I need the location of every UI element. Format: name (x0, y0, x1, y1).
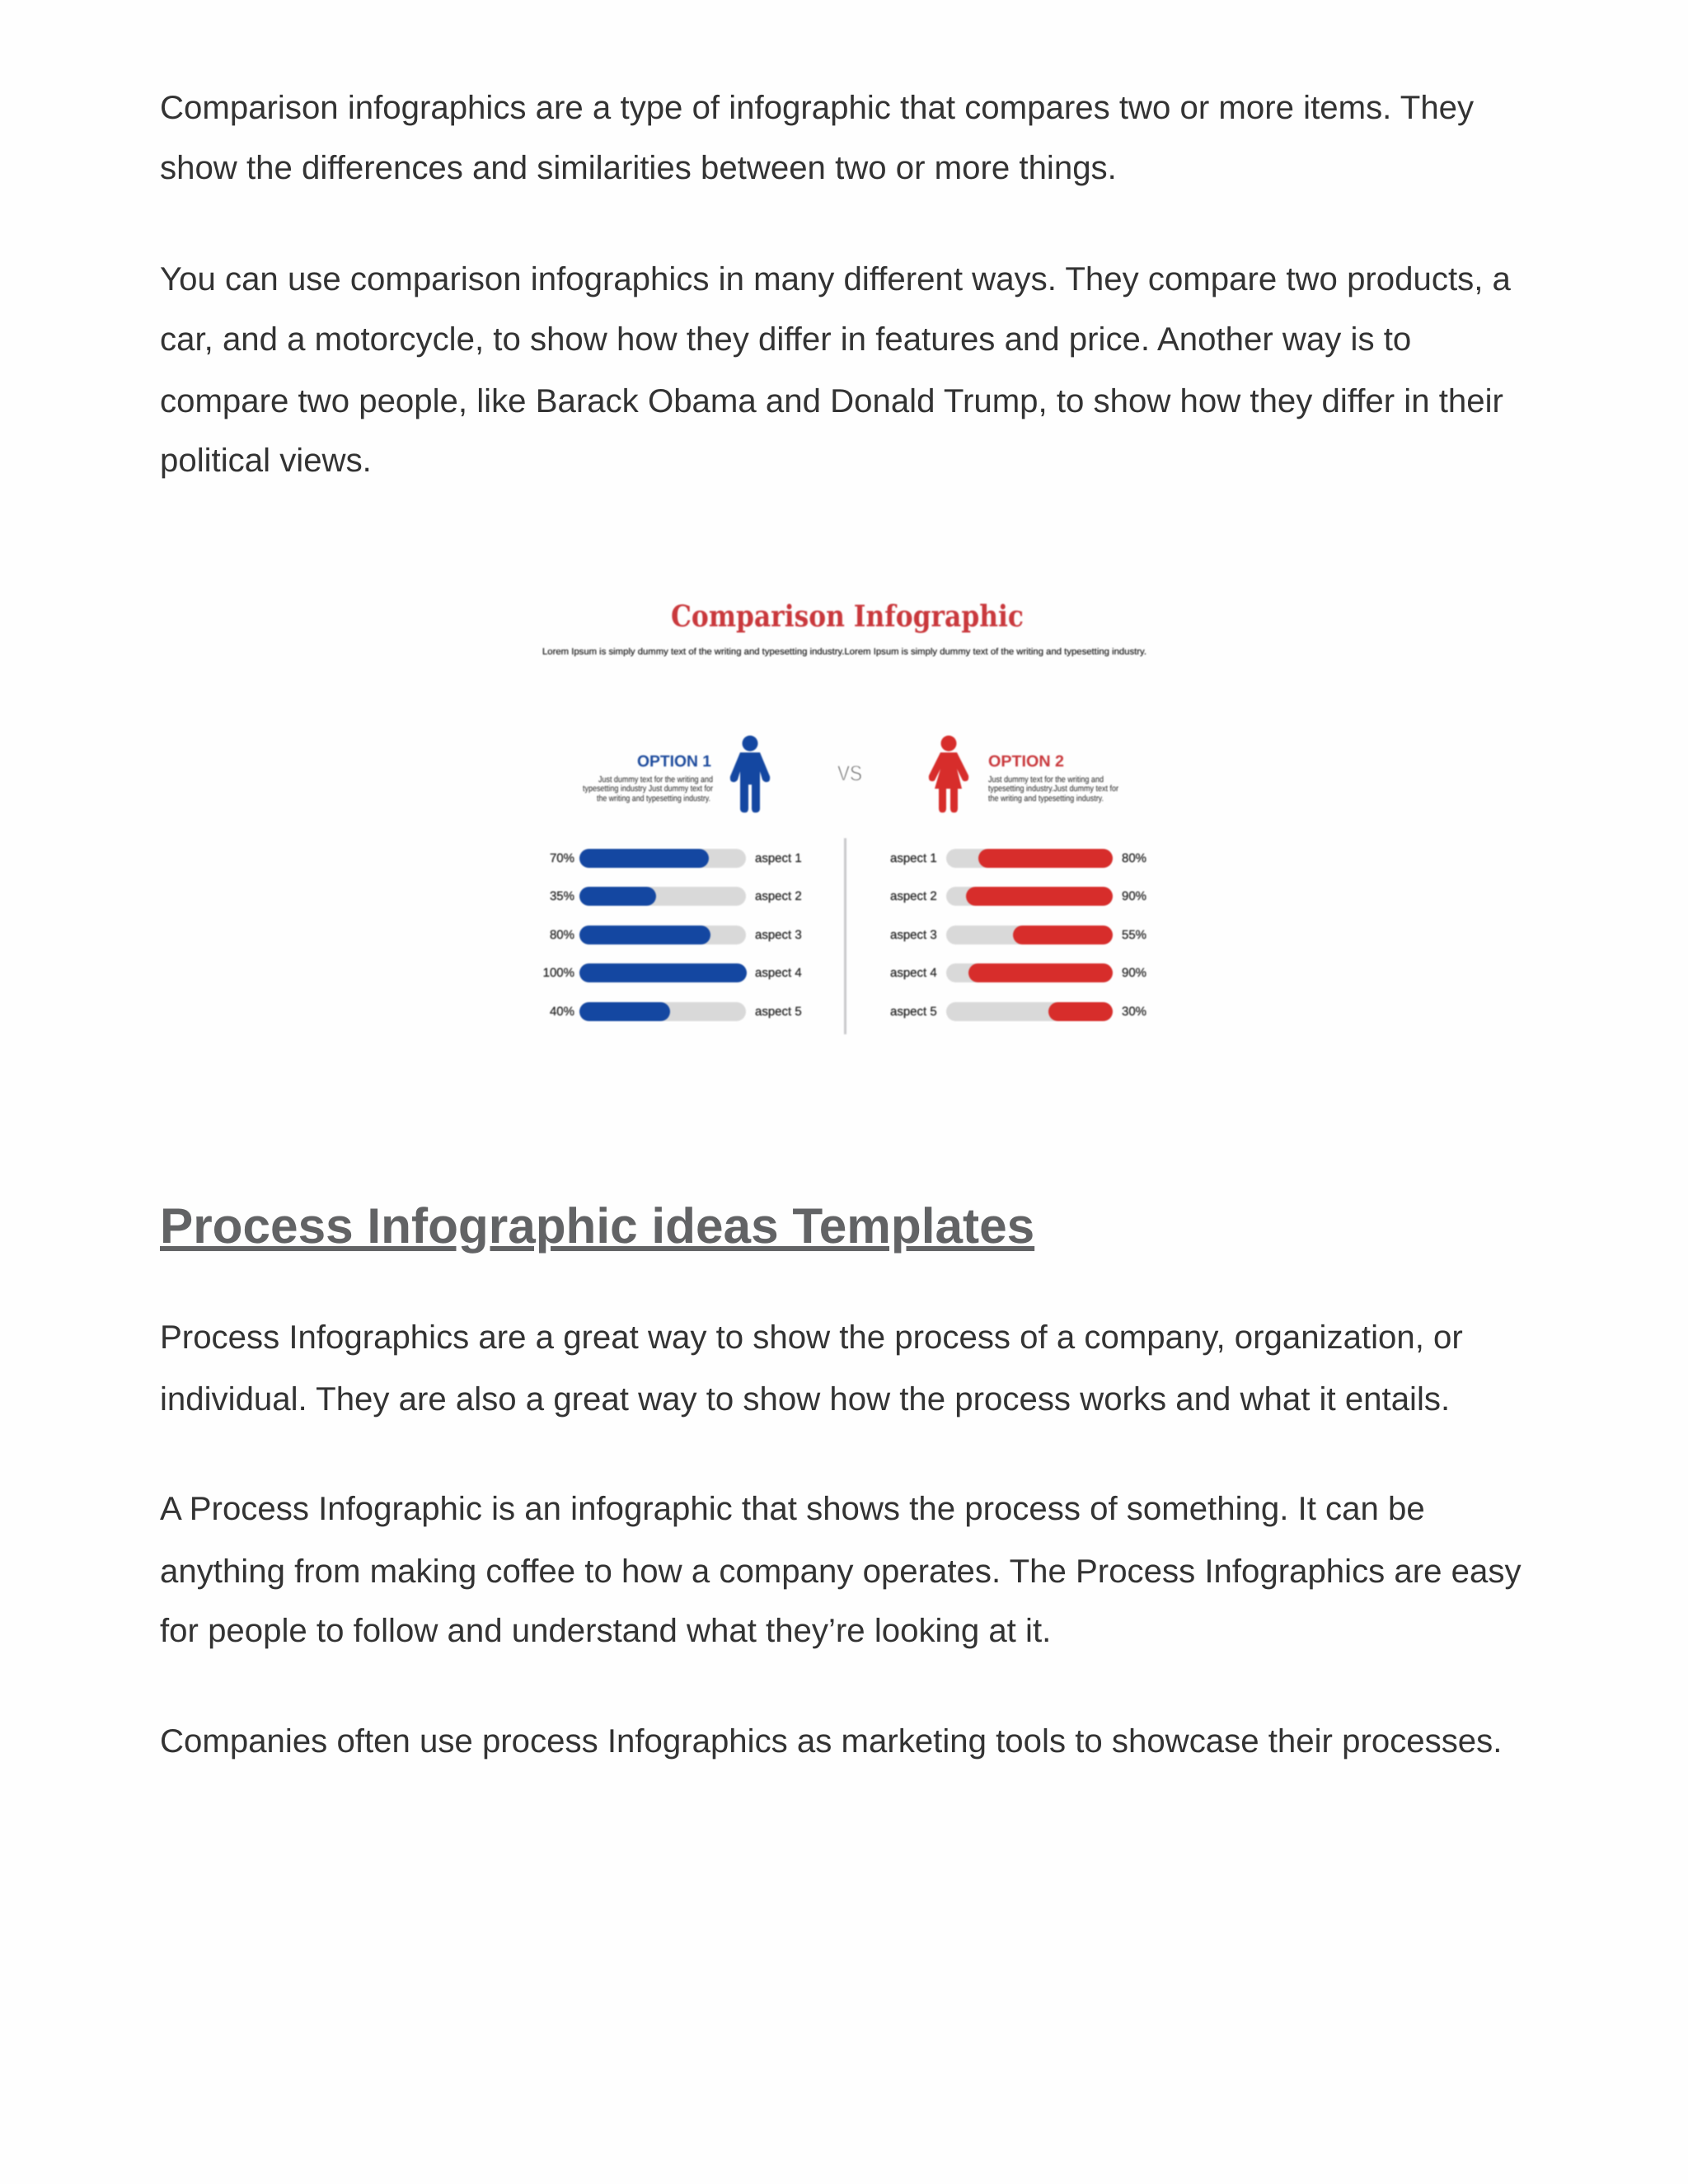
text block: comparison uses (160, 260, 1512, 479)
option 2 heading and description: typesetting industry.Just dummy text for (988, 784, 1118, 794)
option 1 heading and description: typesetting industry Just dummy text for (583, 784, 713, 794)
row: aspect 4 (890, 963, 1146, 982)
row: aspect 3: aspect 3 (755, 928, 802, 942)
vs label: VS (837, 761, 862, 785)
infographic title: Comparison Infographic (671, 599, 1024, 634)
option 2 heading and description (988, 752, 1118, 804)
text block: comparison intro (160, 89, 1475, 186)
divider (844, 838, 846, 1034)
row: aspect 3: 80% (550, 928, 574, 942)
text block: process definition (160, 1490, 1522, 1649)
row: aspect 2: aspect 2 (890, 889, 937, 903)
bar chart: option 1 (543, 849, 802, 1021)
text block: comparison intro: Comparison infographics are a type of infographic that compares two or more items. They (160, 89, 1475, 126)
row: aspect 3 (890, 926, 1146, 944)
row: aspect 5: 30% (1122, 1005, 1146, 1019)
row: aspect 5 (890, 1002, 1146, 1021)
row: aspect 5: 40% (550, 1005, 574, 1019)
row: aspect 4 (543, 963, 802, 982)
bar chart: option 2 (890, 849, 1146, 1021)
text block: process intro (160, 1319, 1463, 1418)
text block: comparison uses: car, and a motorcycle, to show how they differ in features and price. Another way is to (160, 321, 1411, 358)
option 2 heading and description: the writing and typesetting industry. (988, 794, 1104, 804)
text block: comparison uses: compare two people, like Barack Obama and Donald Trump, to show how they differ in their (160, 382, 1503, 419)
option 1 heading and description (583, 752, 713, 804)
option 1 heading and description: OPTION 1 (637, 752, 711, 771)
text block: comparison uses: You can use comparison infographics in many different ways. They compare two products, a (160, 260, 1512, 298)
text block: process definition: A Process Infographic is an infographic that shows the process of something. It can be (160, 1490, 1425, 1527)
text block: process intro: Process Infographics are a great way to show the process of a company, organization, or (160, 1319, 1463, 1356)
row: aspect 2 (890, 887, 1146, 906)
row: aspect 2: 90% (1122, 889, 1146, 903)
text block: process definition: for people to follow and understand what they’re looking at it. (160, 1612, 1051, 1649)
panel: comparison infographic (542, 599, 1146, 1034)
option 1 heading and description: the writing and typesetting industry. (597, 794, 710, 804)
option 2 heading and description: Just dummy text for the writing and (988, 775, 1104, 785)
row: aspect 4: 90% (1122, 966, 1146, 980)
row: aspect 1: aspect 1 (755, 851, 802, 865)
text block: comparison uses: political views. (160, 442, 372, 479)
row: aspect 4: aspect 4 (755, 966, 802, 980)
text block: comparison intro: show the differences and similarities between two or more things. (160, 149, 1117, 186)
text block: process intro: individual. They are also a great way to show how the process works and what it entails. (160, 1380, 1450, 1418)
row: aspect 3: 55% (1122, 928, 1146, 942)
row: aspect 5: aspect 5 (890, 1005, 937, 1019)
row: aspect 5: aspect 5 (755, 1005, 802, 1019)
row: aspect 1: 70% (550, 851, 574, 865)
row: aspect 1: 80% (1122, 851, 1146, 865)
row: aspect 2: 35% (550, 889, 574, 903)
row: aspect 1 (890, 849, 1146, 868)
row: aspect 1: aspect 1 (890, 851, 937, 865)
heading: process infographic ideas templates: Process Infographic ideas Templates (160, 1197, 1034, 1254)
row: aspect 3: aspect 3 (890, 928, 937, 942)
infographic subtitle: Lorem Ipsum is simply dummy text of the writing and typesetting industry.Lorem Ipsum is simply dummy text of the writing and typesetting industry. (542, 647, 1146, 657)
row: aspect 1 (550, 849, 802, 868)
text block: process definition: anything from making coffee to how a company operates. The Process Infographics are easy (160, 1553, 1522, 1590)
row: aspect 3 (550, 926, 802, 944)
row: aspect 4: aspect 4 (890, 966, 937, 980)
option 2 heading and description: OPTION 2 (988, 752, 1064, 771)
icon: woman in red (929, 735, 968, 813)
row: aspect 2: aspect 2 (755, 889, 802, 903)
row: aspect 2 (550, 887, 802, 906)
icon: man in blue (730, 735, 770, 813)
row: aspect 4: 100% (543, 966, 574, 980)
option 1 heading and description: Just dummy text for the writing and (598, 775, 713, 785)
text block: process marketing use: Companies often use process Infographics as marketing tools to showcase their processes. (160, 1722, 1502, 1760)
row: aspect 5 (550, 1002, 802, 1021)
